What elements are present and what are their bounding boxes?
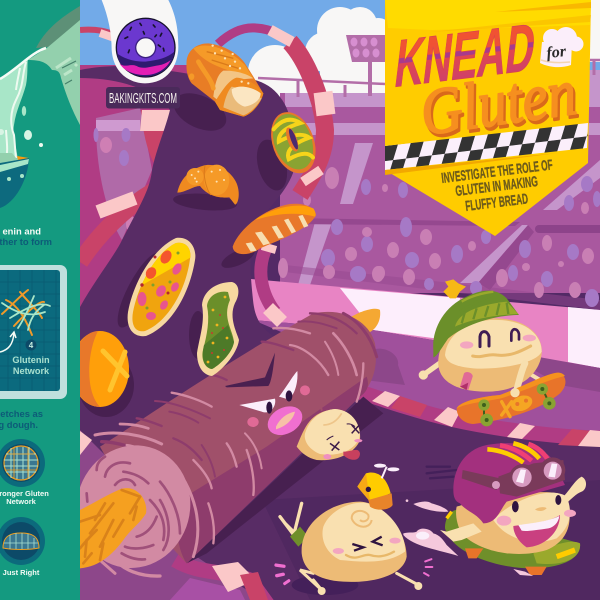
left teal panel [0,0,80,600]
food: green glazed donut [263,106,324,179]
icon: donut logo [116,18,176,78]
bread foods [177,106,324,254]
subtitle: GLUTEN IN MAKING [455,174,539,200]
food: croissant [177,165,239,205]
website label: BAKINGKITS.COM [109,90,177,107]
clouds [248,0,600,99]
mixing bowl [0,153,29,208]
dust puffs [403,499,458,556]
milk pour stream [0,48,46,165]
arena wall [240,278,600,368]
left magenta ground [80,65,188,307]
food: herb flatbread [197,282,239,376]
character: crashed dough with duck [280,464,433,595]
label: just right: Just Right [3,568,40,577]
rolling pin left handle [80,488,146,568]
track ramp [258,320,600,430]
number badge: 4 [29,341,34,350]
label: stronger gluten network: Network [6,497,37,506]
food: baguette [233,204,316,254]
lower pink strip [80,431,268,600]
pouring jug [28,6,80,125]
subtitle: FLUFFY BREAD [465,191,529,215]
label: stronger gluten network [0,490,48,504]
text: glutenin and gliadin: ther to form [0,236,52,247]
crowd seats [278,167,600,307]
roller shadow and rolling pin [63,309,383,581]
striped loop track [80,28,326,322]
text: glutenin and gliadin: enin and [2,226,41,236]
character: squashed dough [297,409,362,460]
road shadows [78,86,292,417]
network lattice [2,290,50,335]
food: pizza slice [128,230,195,336]
title: Gluten: Gluten [416,56,581,150]
text: stretches [0,410,42,430]
icon: stronger gluten network [0,439,45,487]
icon: chef hat with for: for [546,43,568,62]
rolling pin right handle [347,309,380,337]
roller hair strokes [95,313,377,557]
impact dashes [274,563,291,586]
text: glutenin and gliadin [0,228,52,245]
food: round bun [80,331,130,407]
text: stretches: etches as [0,408,43,419]
panel: glutenin network [0,265,67,399]
checkered flag strip [385,123,588,170]
arrow [0,332,16,352]
food: sliced loaf [186,43,263,117]
character: racing dough with helmet [403,443,586,576]
rolling pin end face [63,432,204,581]
angry rolling pin face [225,353,310,441]
character: skateboarding dough [419,279,565,426]
translucent seats patch [94,108,152,240]
logo teardrop [102,0,178,83]
floodlight [346,35,385,96]
website label [106,87,180,108]
icon: chef hat with for [540,27,584,67]
panel: glutenin network: Network [13,366,50,376]
dark road [80,66,600,600]
icon: just right [0,517,45,565]
subtitle [441,157,554,215]
dough characters [280,279,586,595]
curved side track stripes [360,391,600,447]
icon: duck propeller hat [357,464,399,510]
label: stronger gluten network: ronger Gluten [0,489,49,498]
label: glutenin network: Glutenin [12,355,50,365]
title banner [385,0,591,236]
rolling pin body [100,312,376,563]
